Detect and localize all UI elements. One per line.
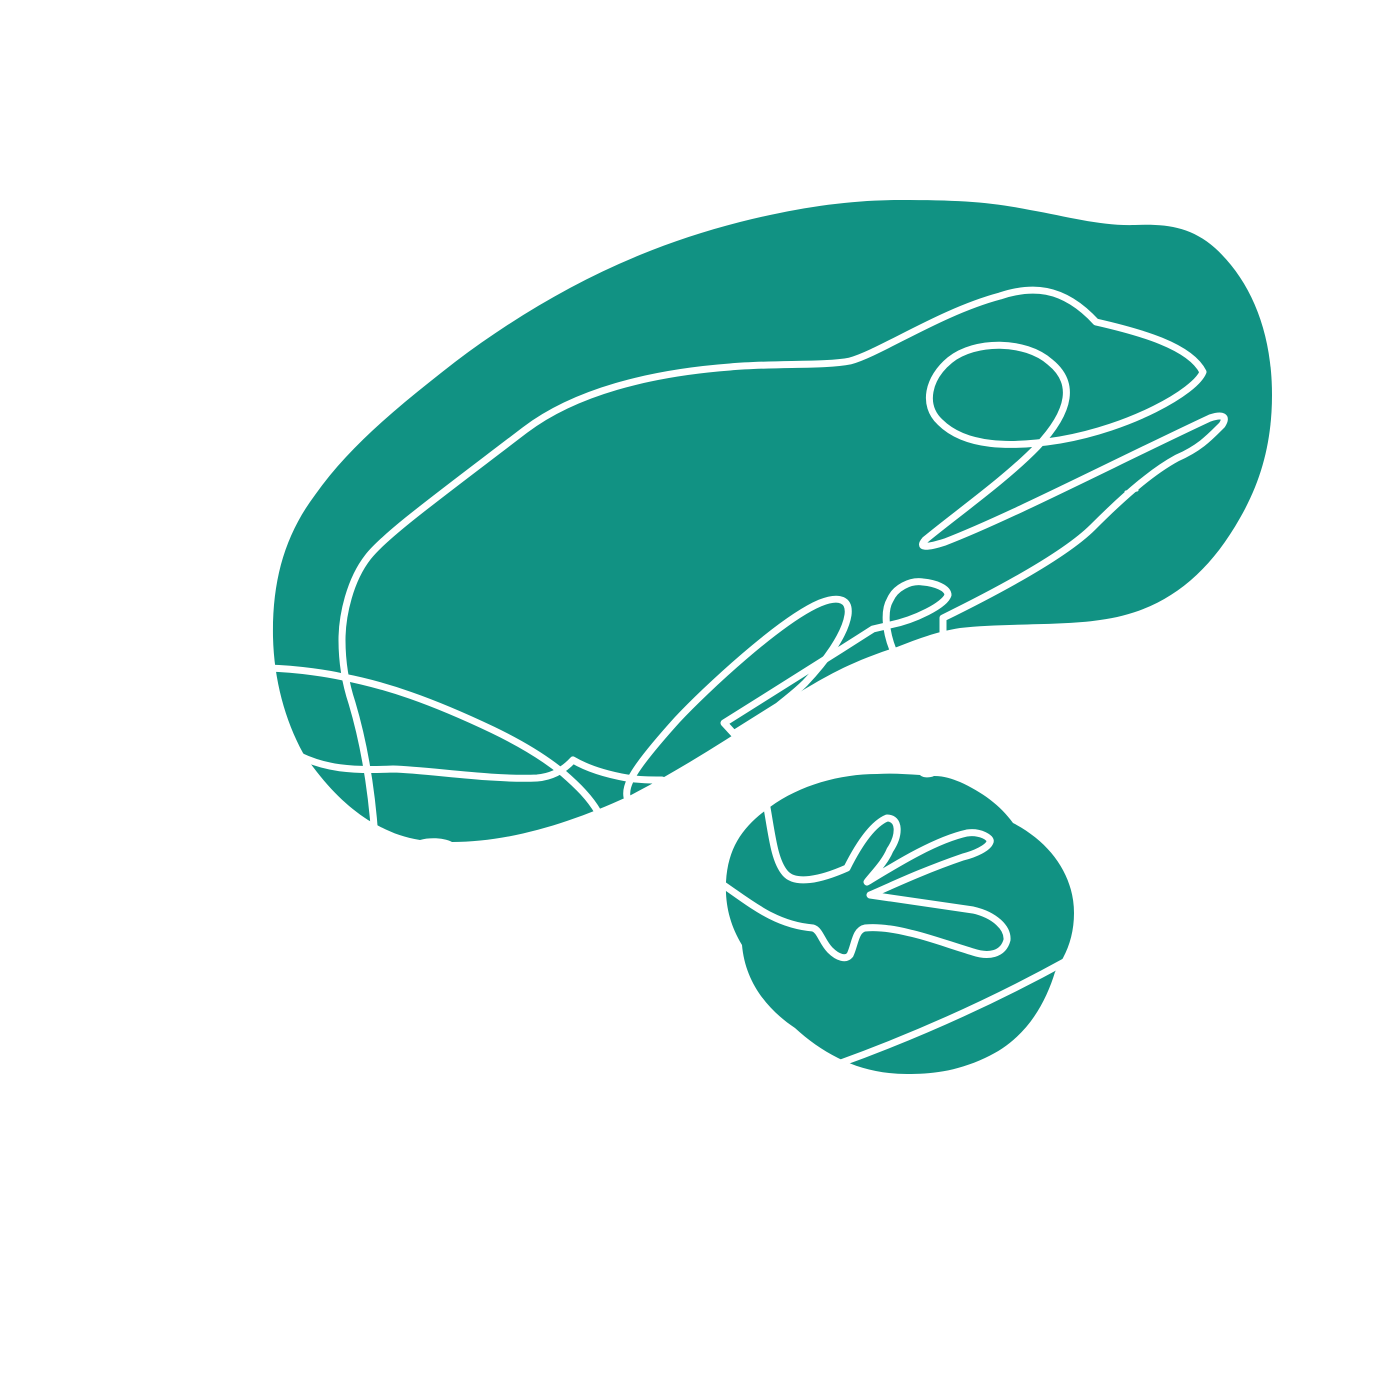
frog outline: head and back (268, 290, 1224, 1064)
blob: small teal foot background (726, 774, 1074, 1074)
blob: large teal body background (273, 200, 1272, 842)
frog outline: small tick on forearm (1126, 490, 1137, 492)
frog outline: hind leg arc (268, 668, 598, 812)
frog outline: belly line (300, 756, 662, 780)
frog outline: front leg (627, 599, 848, 797)
foot lower line (838, 960, 1068, 1064)
foot line art (722, 802, 1007, 958)
frog outline: finger loop and upper arm (724, 582, 948, 735)
